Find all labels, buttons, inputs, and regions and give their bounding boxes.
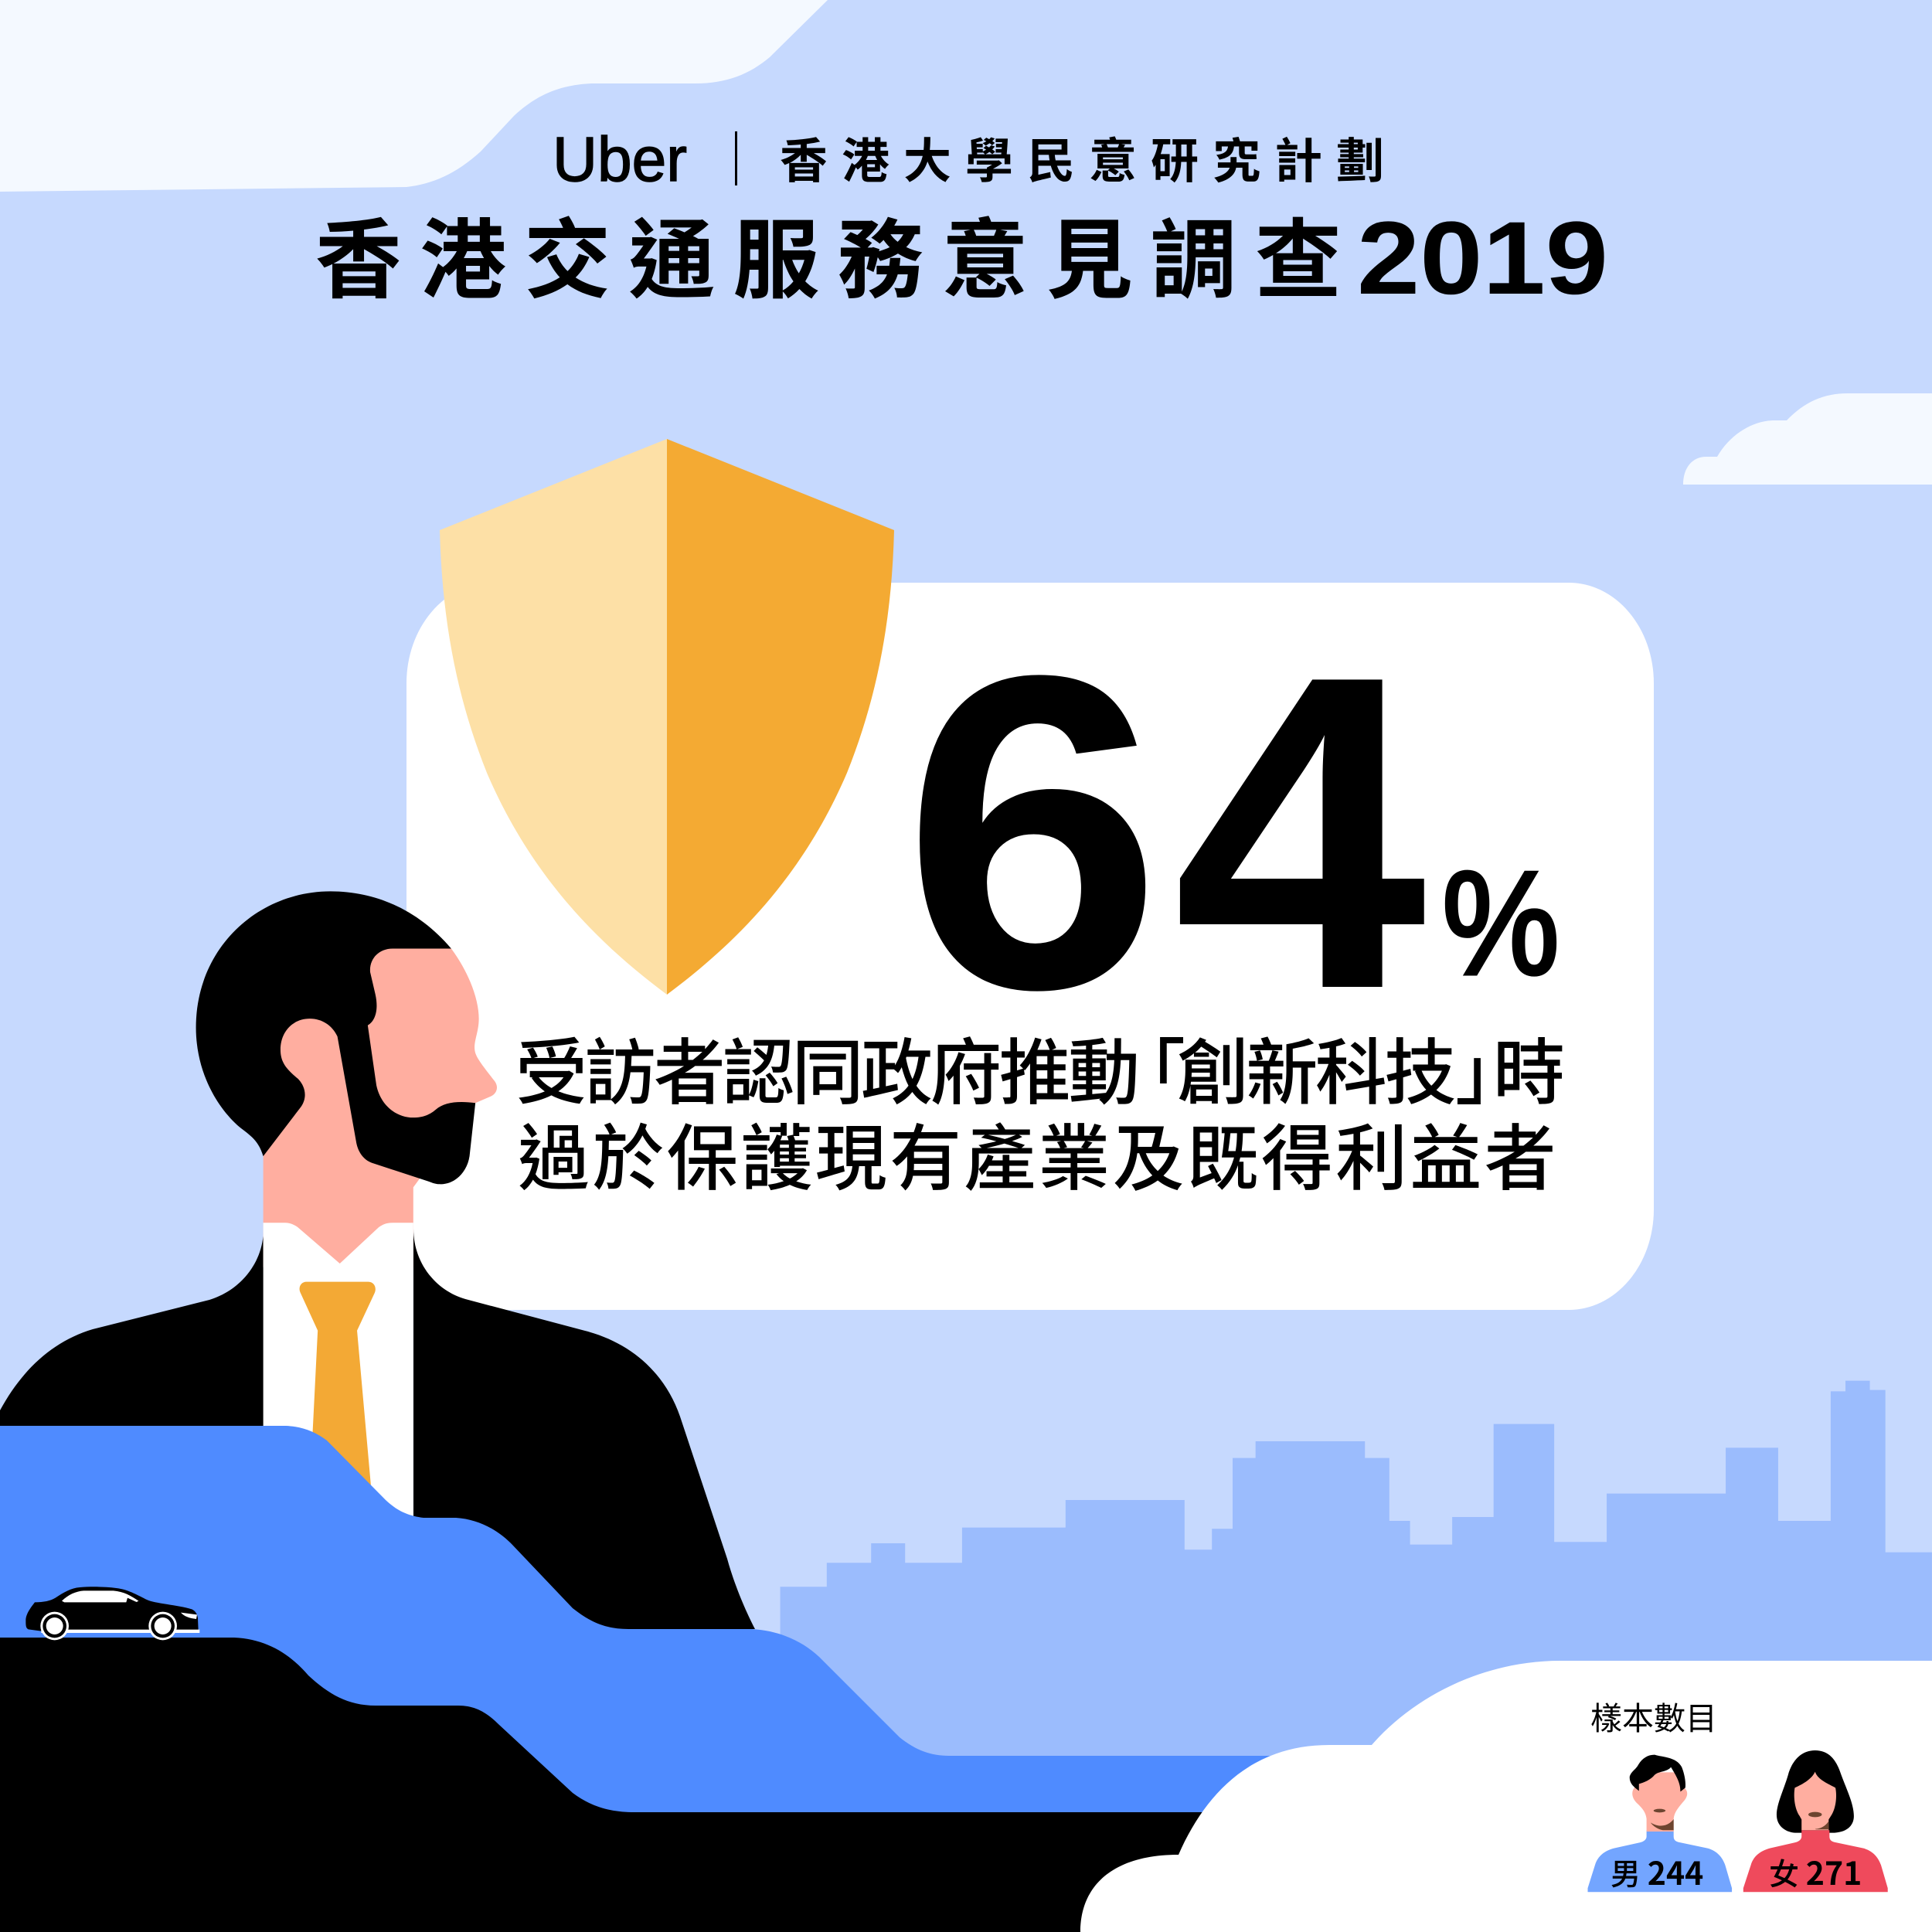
panel: statistic card bbox=[406, 583, 1654, 1310]
sample size heading: 樣本數目 bbox=[1590, 1701, 1717, 1736]
label: female count: 女 271 bbox=[1769, 1848, 1862, 1894]
hill: blue bbox=[0, 1426, 1391, 1932]
big number 64%: % bbox=[1442, 842, 1560, 1005]
statistic description bbox=[515, 1033, 1563, 1199]
icon: shield bbox=[440, 439, 894, 995]
icon: car bbox=[26, 1587, 199, 1640]
statistic description: 創新科技 bbox=[1177, 1033, 1454, 1114]
person: male bbox=[1588, 1755, 1732, 1892]
cloud: top left bbox=[0, 0, 828, 192]
divider between logos bbox=[735, 131, 737, 185]
figure: bearded man in suit bbox=[0, 891, 755, 1629]
big number 64% bbox=[903, 583, 1560, 1082]
cloud: top right bbox=[1683, 393, 1932, 485]
statistic description: 」 bbox=[1455, 1033, 1524, 1114]
person: female bbox=[1743, 1750, 1888, 1892]
statistic description: 過於保護現有產業及既得利益者 bbox=[518, 1119, 1559, 1199]
statistic description: 時 bbox=[1493, 1033, 1563, 1114]
partner name: 香港大學民意研究計劃 bbox=[780, 135, 1398, 189]
shirt bbox=[264, 1223, 413, 1560]
statistic description: 「 bbox=[1114, 1033, 1184, 1114]
title: 2019 bbox=[1357, 201, 1608, 316]
skyline bbox=[781, 1381, 1932, 1777]
hill: black road bbox=[0, 1638, 1236, 1932]
hair and beard bbox=[196, 891, 475, 1184]
tie bbox=[300, 1282, 376, 1489]
suit bbox=[0, 1229, 755, 1629]
big number 64%: 4 bbox=[1173, 583, 1430, 1082]
logo: Uber: Uber bbox=[553, 124, 687, 195]
cloud: bottom right bbox=[1080, 1661, 1932, 1932]
title bbox=[315, 201, 1608, 316]
skin bbox=[264, 948, 497, 1267]
title: 香港交通服務意見調查 bbox=[315, 213, 1359, 309]
big number 64%: 6 bbox=[903, 583, 1162, 1082]
label: male count: 男 244 bbox=[1611, 1848, 1703, 1894]
statistic description: 受訪者認同政府推動 bbox=[515, 1033, 1138, 1114]
